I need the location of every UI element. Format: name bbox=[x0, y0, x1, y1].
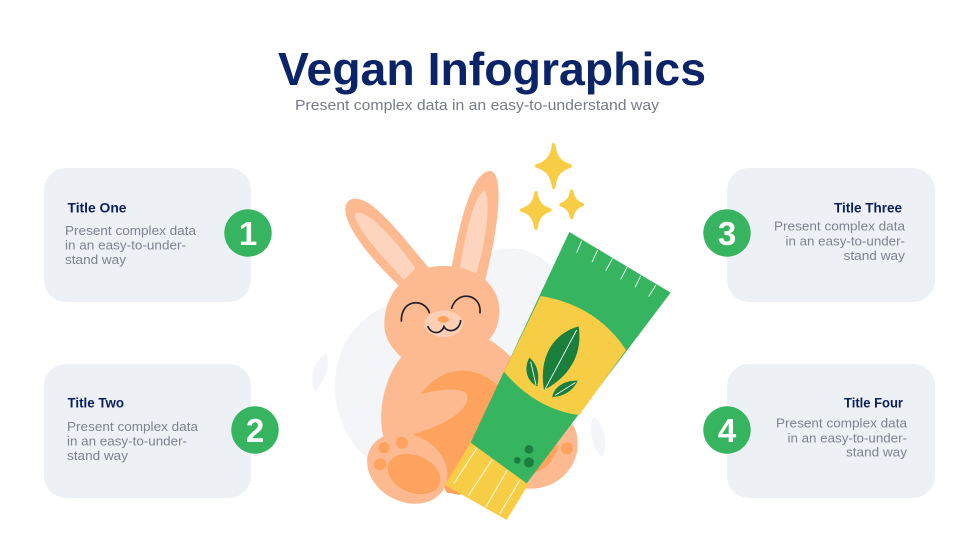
right inner ear bbox=[460, 190, 488, 276]
text block one bbox=[65, 223, 197, 267]
heading: title one: Title One bbox=[68, 200, 127, 216]
text block two bbox=[67, 419, 199, 463]
number badge 2 bbox=[231, 406, 279, 454]
text block two: Present complex data bbox=[67, 419, 199, 434]
sparkles bbox=[522, 145, 582, 228]
left ear bbox=[345, 199, 429, 287]
right foot shadow bbox=[533, 445, 558, 473]
tube crimp bbox=[445, 443, 529, 520]
left foot bbox=[355, 419, 460, 517]
leaves bbox=[526, 326, 579, 397]
right ear bbox=[452, 171, 499, 283]
head bbox=[384, 266, 499, 358]
number badge 4: 4 bbox=[718, 412, 737, 449]
tube label band bbox=[504, 296, 626, 415]
heading: title two: Title Two bbox=[68, 394, 124, 410]
tube body bbox=[471, 232, 671, 483]
panel: title two bbox=[44, 364, 279, 498]
side leaf left bbox=[312, 353, 328, 392]
number badge 1 bbox=[224, 209, 272, 257]
number badge 3 bbox=[703, 209, 751, 257]
heading: title four: Title Four bbox=[844, 394, 904, 410]
right foot toe bbox=[561, 442, 573, 454]
card background three bbox=[727, 168, 935, 302]
muzzle bbox=[424, 310, 463, 337]
text block three: Present complex data bbox=[774, 219, 906, 234]
card background two bbox=[44, 364, 251, 498]
text block one: in an easy-to-under- bbox=[65, 238, 186, 252]
text block three: in an easy-to-under- bbox=[786, 234, 905, 249]
panel: title one bbox=[44, 168, 272, 302]
text block four: Present complex data bbox=[776, 415, 908, 430]
card background four bbox=[727, 364, 935, 498]
background blob bbox=[335, 248, 567, 483]
illustration: rabbit hugging tube bbox=[312, 145, 671, 520]
subtitle: Present complex data in an easy-to-understand way bbox=[295, 97, 660, 114]
side leaf right bbox=[591, 417, 605, 457]
number badge 2: 2 bbox=[246, 412, 264, 449]
left inner ear bbox=[355, 213, 415, 280]
panel: title three bbox=[703, 168, 935, 302]
text block one: stand way bbox=[65, 252, 127, 267]
right foot bbox=[513, 423, 578, 489]
panel: title four bbox=[703, 364, 935, 498]
nose bbox=[438, 316, 449, 323]
text block two: in an easy-to-under- bbox=[67, 434, 187, 448]
text block four: stand way bbox=[846, 445, 908, 460]
body bbox=[381, 340, 520, 477]
number badge 3: 3 bbox=[718, 215, 736, 252]
heading: title three: Title Three bbox=[834, 200, 902, 216]
text block three: stand way bbox=[844, 248, 906, 263]
left foot pad bbox=[382, 446, 446, 502]
belly and arm bbox=[412, 371, 510, 495]
tube ticks bbox=[454, 241, 656, 513]
number badge 4 bbox=[703, 406, 751, 454]
tube bbox=[445, 232, 671, 520]
text block four: in an easy-to-under- bbox=[788, 430, 907, 445]
text block three bbox=[774, 219, 906, 263]
dots bbox=[514, 445, 534, 467]
eyes and mouth bbox=[401, 296, 480, 333]
title: Vegan Infographics bbox=[278, 43, 706, 95]
card background one bbox=[44, 168, 251, 302]
text block four bbox=[776, 415, 908, 460]
toes bbox=[374, 437, 408, 470]
number badge 1: 1 bbox=[239, 215, 257, 252]
text block one: Present complex data bbox=[65, 223, 197, 238]
text block two: stand way bbox=[67, 448, 129, 463]
